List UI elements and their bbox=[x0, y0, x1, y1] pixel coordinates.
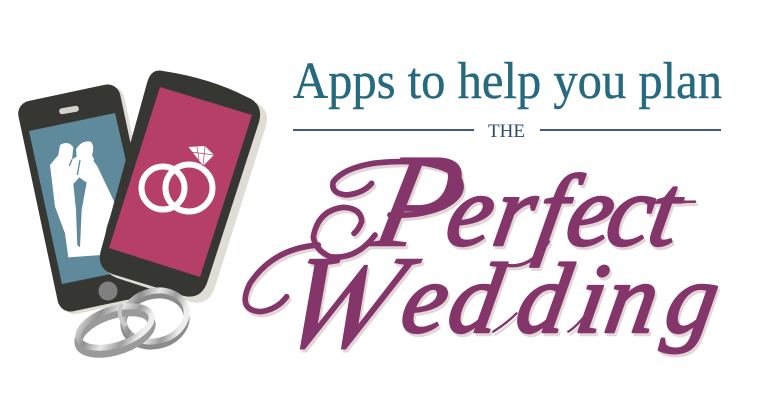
icon: silver wedding rings bbox=[73, 284, 192, 362]
script title: perfect wedding bbox=[245, 125, 728, 376]
word: perfect: erfect bbox=[439, 155, 692, 268]
word: perfect bbox=[361, 125, 692, 276]
left phone bbox=[16, 82, 166, 316]
right phone screen bbox=[109, 87, 252, 277]
right phone bbox=[100, 70, 267, 303]
speaker bbox=[59, 105, 79, 115]
left phone screen bbox=[29, 113, 150, 284]
word: perfect: P bbox=[361, 125, 476, 276]
decorative swashes bbox=[245, 162, 695, 332]
couple silhouette bbox=[50, 141, 122, 257]
divider: the: THE bbox=[488, 121, 525, 142]
home button bbox=[98, 282, 118, 300]
heading: apps to help you plan: Apps to help you plan bbox=[293, 53, 722, 110]
icon: interlocked wedding rings with diamond bbox=[142, 146, 214, 212]
word: wedding: edding bbox=[394, 243, 728, 354]
word: wedding bbox=[262, 227, 728, 376]
word: wedding: W bbox=[262, 227, 433, 376]
